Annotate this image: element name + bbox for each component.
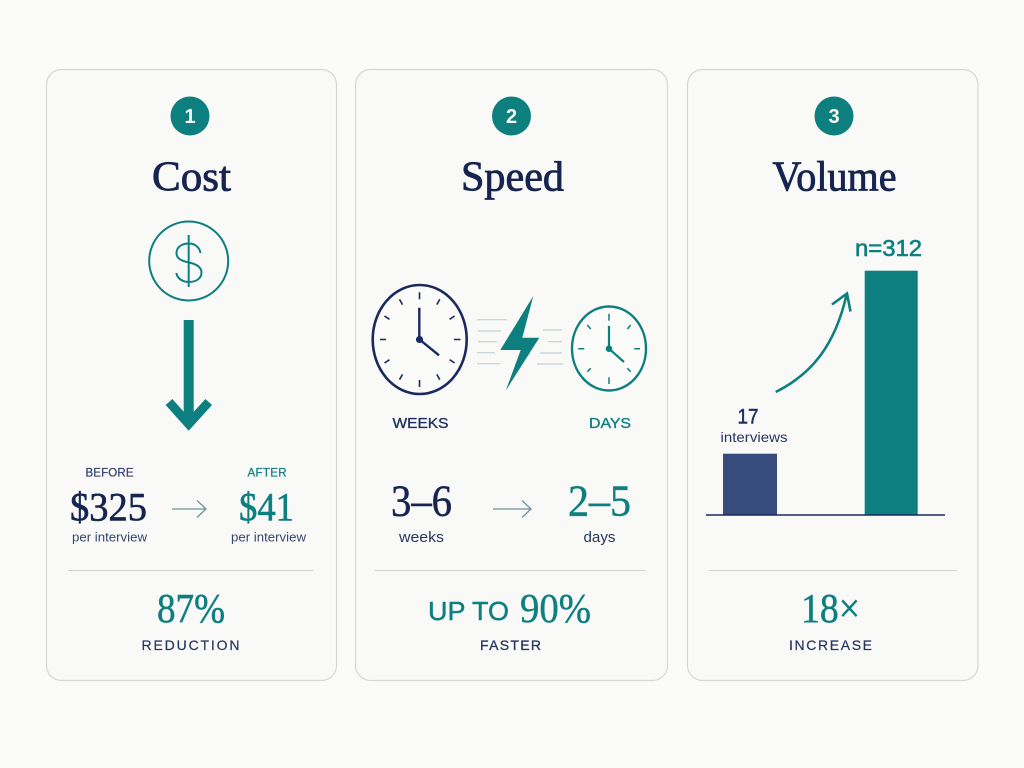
- panel: cost: [46, 70, 336, 680]
- stat: up to 90% faster: UP TO: [428, 596, 509, 626]
- badge: 3: 3: [828, 106, 840, 128]
- after value: $41: [239, 484, 294, 530]
- icon: days clock: [572, 306, 646, 390]
- heading: cost: Cost: [152, 154, 231, 200]
- stat: up to 90% faster: FASTER: [480, 637, 541, 653]
- icon: speed lines left: [477, 320, 507, 364]
- icon: dollar coin: [149, 222, 228, 300]
- arrow: growth: [776, 294, 850, 392]
- arrow: weeks to days: [493, 500, 531, 518]
- arrow: before to after: [172, 500, 206, 518]
- heading: speed: Speed: [461, 154, 564, 200]
- label: 17 interviews: 17: [738, 406, 758, 428]
- arrow: cost down: [169, 320, 209, 424]
- after value: per interview: [231, 530, 307, 544]
- badge: 1: 1: [184, 106, 196, 128]
- label: 17 interviews: [720, 406, 788, 445]
- after range: [568, 476, 631, 546]
- panel: speed: [356, 70, 668, 680]
- stat: 87% reduction: REDUCTION: [142, 637, 240, 653]
- stat: 18x increase: [789, 585, 872, 653]
- before range: 3–6: [391, 476, 452, 526]
- after value: AFTER: [248, 468, 286, 480]
- before value: [70, 468, 148, 544]
- bar chart: [706, 235, 945, 515]
- badge: 2: [492, 96, 531, 136]
- bar: n=312: [865, 271, 918, 515]
- icon: weeks clock: [373, 285, 467, 394]
- label: n=312: n=312: [855, 235, 922, 261]
- before range: [391, 476, 452, 546]
- after range: days: [584, 529, 616, 546]
- badge: 3: [814, 96, 854, 136]
- badge: 1: [170, 96, 210, 136]
- stat: 87% reduction: [142, 585, 240, 653]
- heading: volume: Volume: [772, 154, 896, 200]
- before value: BEFORE: [86, 468, 134, 480]
- before range: weeks: [398, 529, 444, 546]
- icon: lightning bolt: [500, 296, 539, 391]
- badge: 2: 2: [506, 106, 517, 128]
- after value: [231, 468, 307, 544]
- stat: 87% reduction: 87%: [157, 585, 225, 631]
- icon: speed lines right: [537, 330, 563, 364]
- before value: per interview: [72, 530, 148, 544]
- label: 17 interviews: interviews: [720, 429, 788, 445]
- label: weeks: WEEKS: [392, 415, 448, 432]
- stat: 18x increase: INCREASE: [789, 637, 872, 653]
- stat: 18x increase: 18×: [801, 585, 860, 631]
- panel: volume: [688, 70, 978, 680]
- stat: up to 90% faster: 90%: [520, 585, 591, 631]
- after range: 2–5: [568, 476, 631, 526]
- before value: $325: [70, 484, 147, 530]
- bar: 17 interviews: [723, 454, 777, 515]
- label: days: DAYS: [589, 415, 631, 432]
- stat: up to 90% faster: [428, 585, 591, 653]
